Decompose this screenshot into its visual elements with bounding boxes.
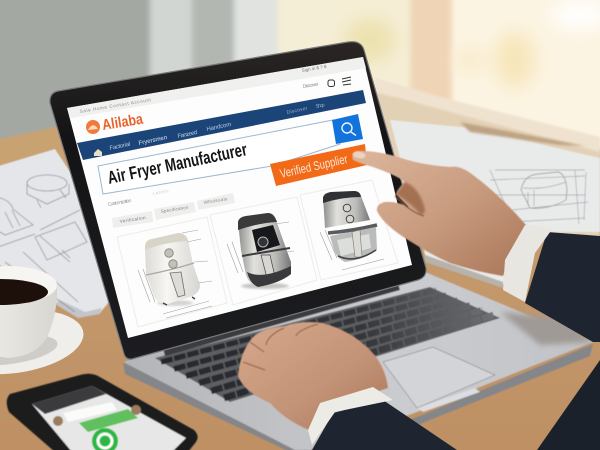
trackpad	[383, 347, 495, 408]
navigation bar: Discover	[286, 106, 308, 116]
filter chips: Wholesale	[203, 196, 228, 205]
navigation bar: Factorial	[109, 142, 131, 152]
chat bubble: white	[63, 402, 117, 422]
top utility bar	[67, 57, 366, 118]
blueprint: right desk	[390, 120, 600, 288]
navigation bar: Handcom	[206, 122, 232, 133]
filter chips	[107, 188, 235, 228]
lower suit sleeve and cuff	[308, 387, 457, 450]
chat bubble: green	[79, 409, 138, 432]
smartphone with chat	[7, 374, 198, 450]
hinge bar	[163, 284, 400, 356]
navigation bar: Fryersmen	[138, 135, 168, 147]
pointing hand	[352, 151, 526, 276]
icon: WhatsApp	[92, 428, 118, 450]
air fryer: glass basket	[323, 191, 377, 262]
navigation bar: Shop	[315, 102, 325, 110]
coffee cup and saucer	[0, 266, 88, 382]
filter chips: Labels	[152, 188, 170, 196]
top utility bar: Sale Home Contact Account	[79, 97, 152, 114]
top utility bar: Sign in $ ? 8	[301, 64, 327, 73]
screen: website: Discover	[302, 81, 319, 90]
search button	[332, 114, 363, 144]
screen: website	[67, 57, 412, 338]
cart and menu icons	[328, 77, 351, 86]
product card lines	[117, 180, 398, 327]
badge: Verified Supplier: Verified Supplier	[279, 152, 349, 181]
filter chips: Verification	[119, 215, 146, 224]
air fryer: black and steel	[238, 213, 291, 289]
search box	[98, 114, 363, 194]
logo: Alilaba	[86, 111, 145, 134]
blueprint: left desk	[0, 149, 135, 318]
filter chips: Customization	[107, 198, 132, 208]
dimension lines	[138, 222, 384, 318]
laptop base	[123, 272, 593, 450]
navigation bar	[77, 90, 366, 160]
avatar icons	[53, 405, 141, 426]
typing hand	[238, 322, 388, 430]
laptop lid bezel	[50, 42, 426, 359]
navigation bar: Fanzeed	[177, 130, 198, 140]
filter chips: Specification	[160, 205, 189, 214]
logo: Alilaba: Alilaba	[101, 111, 145, 134]
heading: Air Fryer Manufacturer: Air Fryer Manufacturer	[106, 139, 249, 188]
right suit sleeve and cuff	[503, 225, 600, 450]
keyboard	[155, 287, 500, 402]
air fryer: white	[145, 233, 200, 306]
